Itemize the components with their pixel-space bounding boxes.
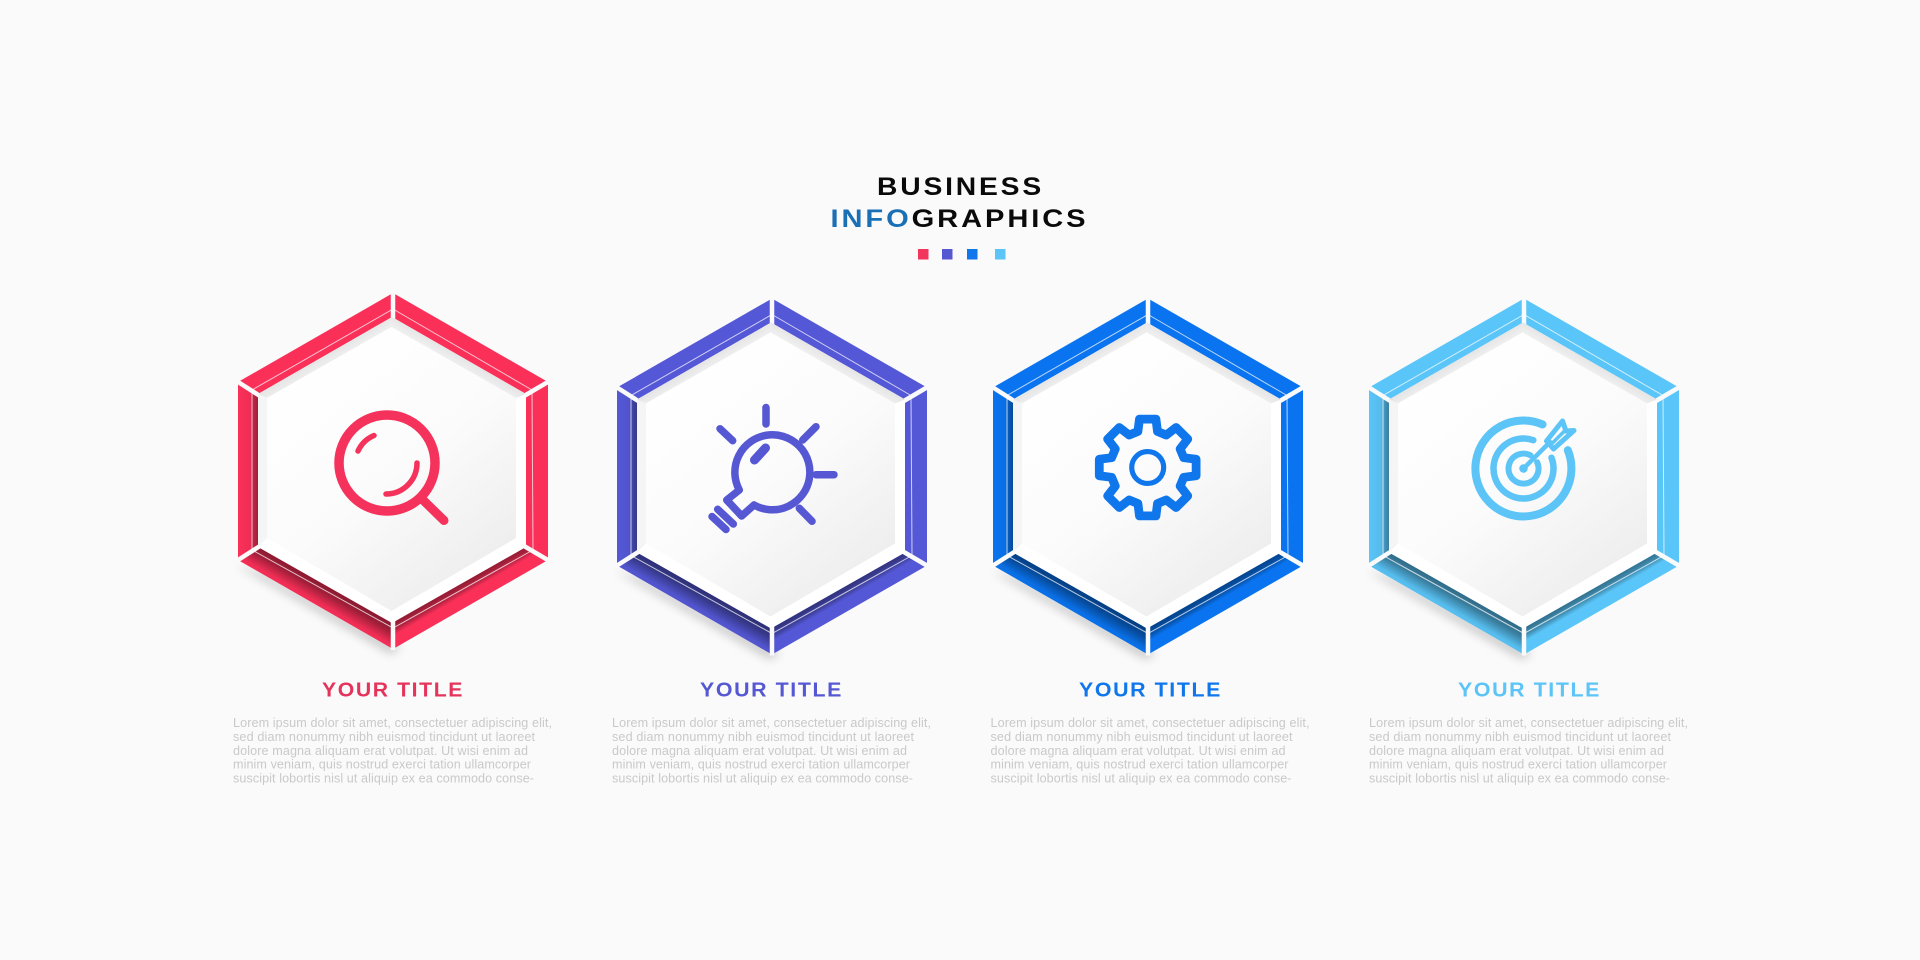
column text: step 4 — [1369, 716, 1688, 786]
column text: step 2: Lorem ipsum dolor sit amet, consectetuer adipiscing elit, — [612, 716, 931, 730]
title — [830, 173, 1088, 233]
column text: step 3: sed diam nonummy nibh euismod tincidunt ut laoreet — [990, 730, 1293, 744]
column text: step 1: Lorem ipsum dolor sit amet, consectetuer adipiscing elit, — [233, 716, 552, 730]
column text: step 4: dolore magna aliquam erat volutpat. Ut wisi enim ad — [1369, 744, 1664, 758]
column text: step 4: suscipit lobortis nisl ut aliquip ex ea commodo conse- — [1369, 772, 1670, 786]
colour key squares — [918, 249, 1006, 260]
column text: step 4: Lorem ipsum dolor sit amet, consectetuer adipiscing elit, — [1369, 716, 1688, 730]
column text: step 1: sed diam nonummy nibh euismod tincidunt ut laoreet — [233, 730, 536, 744]
column text: step 3: minim veniam, quis nostrud exerci tation ullamcorper — [990, 758, 1288, 772]
panel: step 4 hexagon — [1367, 298, 1680, 660]
title: INFO GRAPHICS — [830, 205, 1088, 233]
panel: step 1 hexagon — [236, 292, 550, 654]
column text: step 3: dolore magna aliquam erat volutpat. Ut wisi enim ad — [990, 744, 1286, 758]
icon: light bulb — [712, 408, 834, 530]
panel: step 2 hexagon — [615, 298, 928, 660]
column heading: step 2: YOUR TITLE — [700, 680, 843, 702]
column text: step 1: minim veniam, quis nostrud exerci tation ullamcorper — [233, 758, 531, 772]
icon: gear — [1099, 419, 1196, 516]
column text: step 2: dolore magna aliquam erat volutpat. Ut wisi enim ad — [612, 744, 907, 758]
column text: step 4: sed diam nonummy nibh euismod tincidunt ut laoreet — [1369, 730, 1672, 744]
icon: magnifying glass — [339, 415, 444, 520]
title: BUSINESS — [877, 173, 1044, 201]
column text: step 2: minim veniam, quis nostrud exerci tation ullamcorper — [612, 758, 910, 772]
column text: step 2: sed diam nonummy nibh euismod tincidunt ut laoreet — [612, 730, 914, 744]
panel: step 3 hexagon — [991, 298, 1304, 660]
column text: step 3 — [990, 716, 1310, 786]
column text: step 1: suscipit lobortis nisl ut aliquip ex ea commodo conse- — [233, 772, 534, 786]
column text: step 2 — [612, 716, 931, 786]
column text: step 2: suscipit lobortis nisl ut aliquip ex ea commodo conse- — [612, 772, 913, 786]
column text: step 4: minim veniam, quis nostrud exerci tation ullamcorper — [1369, 758, 1667, 772]
column heading: step 3: YOUR TITLE — [1079, 680, 1222, 702]
column text: step 3: suscipit lobortis nisl ut aliquip ex ea commodo conse- — [990, 772, 1292, 786]
column heading: step 4: YOUR TITLE — [1458, 680, 1601, 702]
column text: step 3: Lorem ipsum dolor sit amet, consectetuer adipiscing elit, — [990, 716, 1310, 730]
column text: step 1: dolore magna aliquam erat volutpat. Ut wisi enim ad — [233, 744, 528, 758]
column text: step 1 — [233, 716, 552, 786]
column heading: step 1: YOUR TITLE — [322, 680, 464, 702]
icon: target with arrow — [1475, 420, 1574, 516]
